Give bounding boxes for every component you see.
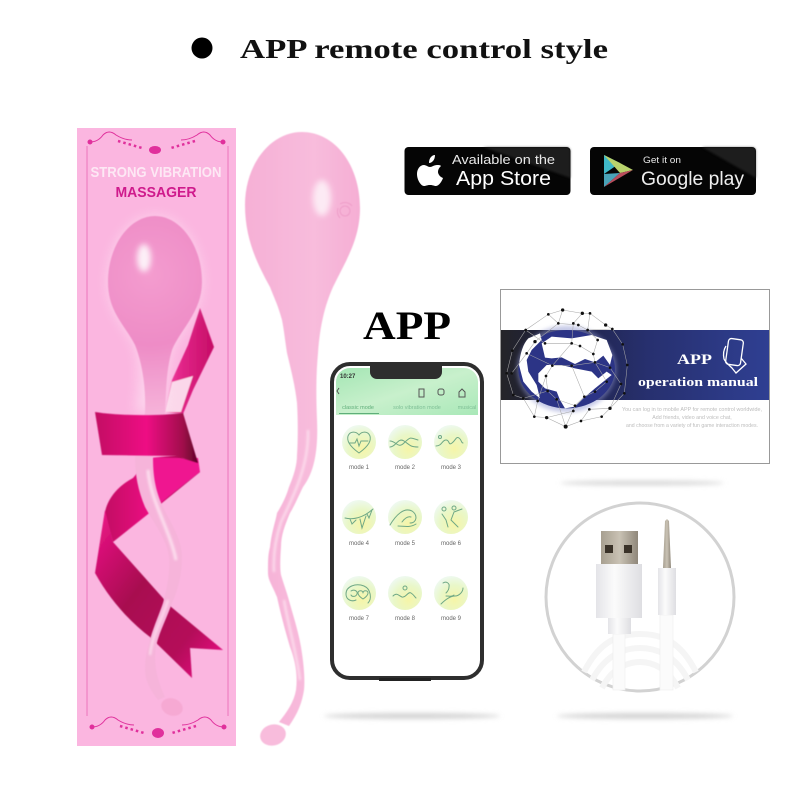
DC jack connector — [658, 519, 676, 615]
manual description: and choose from a variety of fun game interaction modes. — [626, 423, 758, 429]
box background — [77, 128, 236, 746]
massager highlight — [274, 430, 308, 680]
massager glow — [108, 216, 202, 413]
APP heading: APP — [363, 303, 451, 348]
mode 5: mode 5 — [395, 541, 416, 547]
globe network lines — [507, 310, 627, 427]
power button — [337, 203, 352, 218]
box subheading: MASSAGER — [116, 184, 197, 201]
icon: play triangle — [604, 155, 633, 187]
mode 6: mode 6 — [441, 541, 462, 547]
mode 2 — [388, 425, 422, 471]
tab labels: solo vibration mode — [393, 405, 441, 411]
icon: hand holding phone — [724, 338, 746, 373]
mode 7: mode 7 — [349, 616, 370, 622]
mode 8: mode 8 — [395, 616, 416, 622]
manual band — [501, 330, 769, 400]
header icons — [337, 388, 465, 397]
mode 5 — [388, 500, 422, 547]
badge: Google play — [590, 147, 756, 195]
massager tip — [258, 721, 288, 749]
box heading: STRONG VIBRATION — [90, 164, 222, 181]
manual card — [500, 290, 770, 464]
panel: phone — [332, 364, 482, 681]
mode 3 — [434, 425, 468, 471]
tab labels: musical — [458, 405, 476, 411]
App Store large text: App Store — [456, 168, 551, 190]
mode 3: mode 3 — [441, 465, 462, 471]
app header — [336, 368, 478, 415]
USB connector — [596, 531, 642, 634]
panel: operation manual — [500, 290, 770, 464]
mode 9: mode 9 — [441, 616, 462, 622]
mode 1 — [342, 425, 376, 471]
ribbon front band — [95, 412, 198, 463]
cable shadow — [557, 713, 733, 719]
box inner frame — [87, 146, 228, 716]
mode 2: mode 2 — [395, 465, 416, 471]
globe illustration — [505, 308, 629, 429]
notch — [370, 366, 442, 379]
mode 9 — [434, 576, 468, 622]
Google small text: Get it on — [643, 155, 681, 166]
massager on box — [108, 216, 202, 719]
massager body — [245, 132, 360, 726]
mode 8 — [388, 576, 422, 622]
cable circle — [546, 503, 734, 691]
bottom ornament — [90, 717, 226, 738]
ribbon rear — [95, 308, 223, 678]
phone shadow — [324, 713, 500, 719]
mode 4 — [342, 500, 376, 547]
globe land — [519, 333, 612, 408]
mode 6 — [434, 500, 468, 547]
manual description — [622, 407, 762, 429]
tab labels: classic mode — [342, 405, 374, 411]
Google large text: Google play — [641, 169, 745, 190]
manual description: You can log in to mobile APP for remote control worldwide, — [622, 407, 762, 413]
top ornament — [88, 132, 225, 154]
phone body — [332, 364, 482, 678]
tab labels — [339, 405, 476, 414]
globe network nodes — [505, 308, 629, 429]
manual title operation manual: operation manual — [638, 374, 758, 389]
icon: apple — [417, 155, 443, 186]
badge: App Store — [404, 147, 570, 195]
cable wires — [613, 615, 673, 690]
mode 7 — [342, 576, 376, 622]
home connector — [379, 678, 431, 681]
App Store small text: Available on the — [452, 152, 555, 167]
manual title APP: APP — [677, 352, 712, 368]
title text: APP remote control style — [240, 34, 608, 64]
manual description: Add friends, video and voice chat, — [652, 415, 732, 421]
panel: product box — [77, 128, 236, 746]
manual shadow — [560, 480, 724, 486]
cable coils — [584, 634, 696, 688]
panel: massager product — [245, 132, 360, 749]
title bullet — [192, 38, 212, 58]
title — [192, 34, 608, 64]
panel: charging cable — [546, 503, 734, 691]
status bar: 10:27 — [340, 374, 356, 380]
mode 4: mode 4 — [349, 541, 370, 547]
mode 1: mode 1 — [349, 465, 370, 471]
